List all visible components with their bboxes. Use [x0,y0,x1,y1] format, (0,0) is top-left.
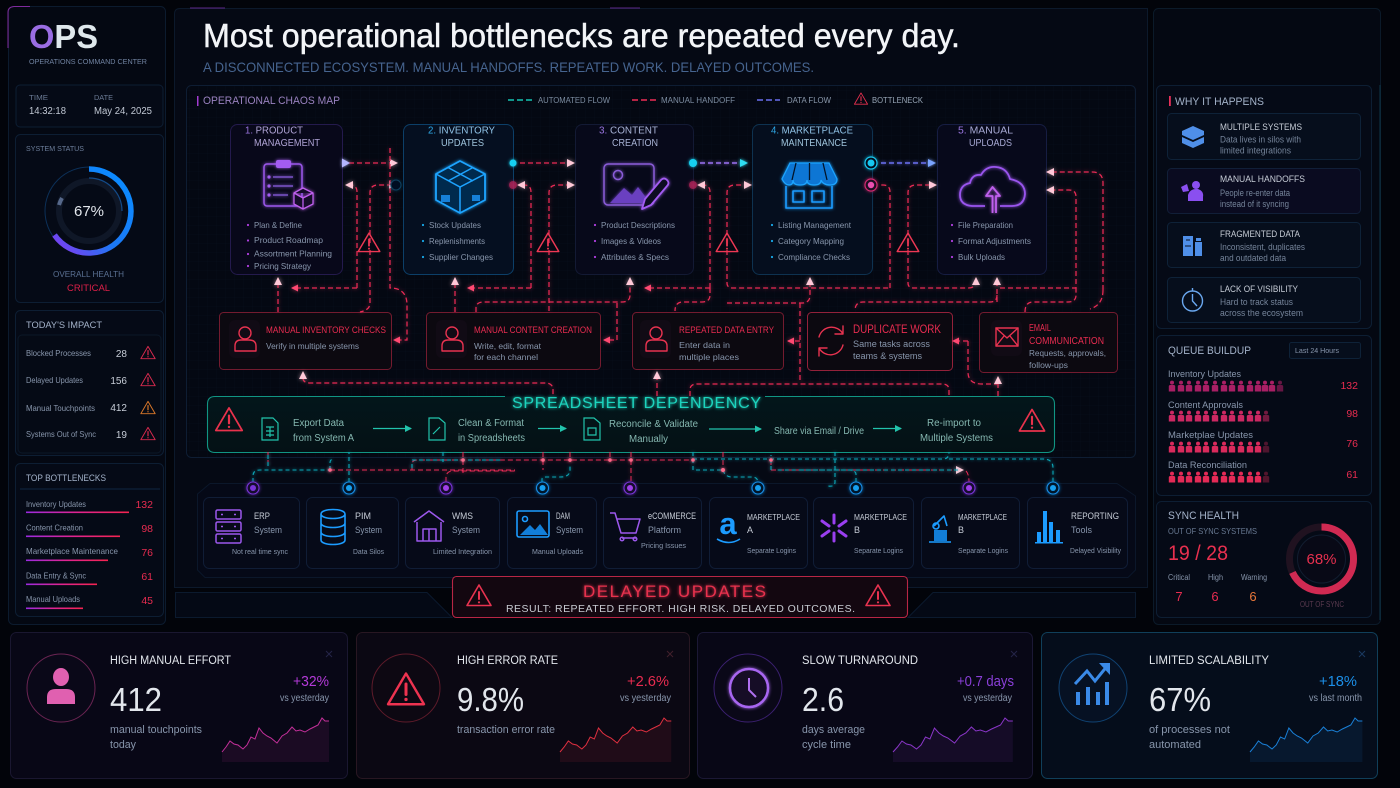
KPI card: high error rate: +2.6% [627,674,669,690]
KPI card: limited scalability: LIMITED SCALABILITY [1149,655,1269,667]
icon: cube stack [1182,126,1204,148]
icon: refresh [819,326,843,356]
manual card: duplicate work: Same tasks across [853,339,931,349]
card 1 bullet list: Assortment Planning [254,248,332,258]
step: re-import: Re-import to [927,418,981,429]
manual card: content creation: Write, edit, format [474,341,542,351]
row: blocked processes: Blocked Processes [26,348,91,358]
window controls [667,651,673,657]
window controls [1359,651,1365,657]
reason: multiple systems: Data lives in silos with [1220,134,1301,144]
system: marketplace C: MARKETPLACE [958,513,1007,522]
icon: person [640,320,671,358]
arrow [873,428,901,430]
reason: lack of visibility: LACK OF VISIBILITY [1220,284,1298,294]
KPI card: limited scalability: +18% [1319,674,1357,690]
row: blocked processes: 28 [116,349,127,360]
legend: MANUAL HANDOFF [661,95,735,105]
KPI card: high manual effort: 412 [110,681,162,718]
manual card: email communication: Requests, approvals, [1029,348,1106,358]
manual card: email communication: follow-ups [1029,360,1068,370]
icon: person [436,320,467,358]
heading: SPREADSHEET DEPENDENCY [512,395,761,412]
queue row: marketplace updates: Marketplae Updates [1168,430,1253,441]
callout: delayed updates [452,576,908,618]
queue row: content approvals [1168,400,1358,422]
system: marketplace A: A [747,525,753,535]
health gauge ring 67% [45,167,133,255]
time and date box: May 24, 2025 [94,106,152,117]
bottleneck: content creation: Content Creation [26,522,83,532]
panel: why it happens: WHY IT HAPPENS [1175,96,1264,108]
panel: sync health: SYNC HEALTH [1168,510,1239,522]
bottleneck: content creation: 98 [141,523,153,535]
KPI card: slow turnaround: cycle time [802,739,851,751]
system: marketplace A: MARKETPLACE [747,513,800,522]
bottleneck: inventory updates [26,499,153,513]
system: eCommerce [604,498,702,568]
process card 5: manual uploads: 5. MANUAL [958,124,1013,136]
reason: lack of visibility [1168,278,1360,322]
time range selector: Last 24 Hours [1295,346,1339,355]
window controls [1011,651,1017,657]
panel: today's impact: TODAY'S IMPACT [26,320,102,331]
bottleneck: manual uploads: Manual Uploads [26,594,80,604]
system: eCommerce: Pricing Issues [641,541,686,550]
severity counts: Warning [1241,573,1267,582]
legend: DATA FLOW [787,95,831,105]
manual handoff connectors [268,148,1103,482]
queue row: data reconciliation: 61 [1346,469,1358,481]
process card 4: marketplace maintenance [752,124,872,274]
card 5 bullet list [951,220,1031,262]
severity counts: High [1208,573,1223,582]
icon: spark [822,515,846,541]
logo: OPS: OPS [29,18,98,55]
manual card: inventory checks: Verify in multiple systems [266,341,359,351]
process card 1: product management [230,124,342,274]
queue row: inventory updates: Inventory Updates [1168,369,1241,380]
chaos map heading: OPERATIONAL CHAOS MAP [203,95,340,107]
row: blocked processes [26,346,155,360]
card 5 bullet list: Bulk Uploads [958,252,1005,262]
manual card: inventory checks: MANUAL INVENTORY CHECKS [266,325,386,336]
icon: letter a: a [719,506,737,541]
step: reconcile and validate [584,418,698,445]
card 3 bullet list: Attributes & Specs [601,252,669,262]
panel: system status [16,134,164,302]
sparkline [893,718,1013,762]
system: reporting: Delayed Visibility [1070,546,1121,555]
KPI card: high manual effort: vs yesterday [280,693,329,704]
systems band [198,484,1136,578]
step: export data [262,418,354,444]
manual card: duplicate work: DUPLICATE WORK [853,324,941,336]
icon: robot arm [929,516,951,542]
system: DAM: System [556,525,583,535]
manual card: email communication: EMAIL [1029,323,1051,334]
arrow [373,428,411,430]
manual card: duplicate work [808,312,952,370]
manual card: repeated data entry: Enter data in [679,340,730,350]
KPI card: slow turnaround: SLOW TURNAROUND [802,655,918,667]
panel: sync health [1156,502,1372,618]
queue row: data reconciliation [1168,460,1358,482]
donut chart 68% [1290,527,1354,591]
panel: sync health: 19 / 28 [1168,542,1228,565]
card 1 bullet list [247,220,332,271]
system: DAM [508,498,596,568]
step: export data: Export Data [293,418,344,429]
bottleneck warning icons on the map [358,233,919,252]
bottleneck: manual uploads: 45 [141,595,153,607]
system: PIM: PIM [355,511,371,521]
card 5 bullet list: Format Adjustments [958,236,1031,246]
icon: image [517,511,549,537]
step: clean and format: Clean & Format [458,418,524,429]
reason: fragmented data: FRAGMENTED DATA [1220,229,1300,239]
sparkline [560,718,671,762]
reason: fragmented data [1168,222,1360,268]
icon: chart in circle [1059,654,1127,722]
data flow arrows between process cards [342,157,935,191]
main title: Most operational bottlenecks are repeated every day. [203,17,960,54]
row: delayed updates: Delayed Updates [26,375,83,385]
automated flow connectors [253,452,1053,486]
process card 1: product management: MANAGEMENT [254,137,321,149]
reason: manual handoffs: MANUAL HANDOFFS [1220,174,1305,184]
system: reporting [1028,498,1128,568]
decorative footer plate right [908,592,1136,618]
system: marketplace B: Separate Logins [854,546,903,555]
bottleneck: marketplace maintenance [26,546,153,561]
system: marketplace C [922,498,1020,568]
donut chart 68%: 68% [1306,551,1337,568]
panel: spreadsheet dependency [208,395,1054,452]
process card 2: inventory updates: UPDATES [441,137,484,149]
panel: system status: CRITICAL [67,283,110,294]
time and date box: DATE [94,93,113,102]
step: re-import [920,418,993,444]
KPI card: slow turnaround: days average [802,724,865,736]
card 4 bullet list [771,220,852,262]
row: delayed updates [26,373,155,387]
icon: cart [610,513,640,541]
severity counts [1168,573,1267,604]
row: delayed updates: 156 [110,376,127,387]
manual card: repeated data entry: REPEATED DATA ENTRY [679,325,775,336]
system: reporting: Tools [1071,525,1092,535]
KPI card: high manual effort [10,632,348,778]
icon: person in circle [27,654,95,722]
icon: person [229,320,260,358]
severity counts: 7 [1175,589,1183,604]
system: ERP: Not real time sync [232,547,288,556]
KPI card: high error rate: transaction error rate [457,724,555,736]
manual card: content creation [426,312,600,370]
manual card: repeated data entry [632,312,784,370]
manual card: content creation: MANUAL CONTENT CREATION [474,325,592,336]
panel: top bottlenecks: TOP BOTTLENECKS [26,473,106,484]
icon: bars [1035,511,1063,544]
KPI card: high error rate: vs yesterday [620,693,671,704]
callout: delayed updates: DELAYED UPDATES [583,582,766,601]
system: DAM: DAM [556,511,570,521]
icon: box [436,161,485,213]
card 1 bullet list: Plan & Define [254,220,302,230]
sparkline [1250,718,1362,762]
legend [508,93,923,105]
panel: queue buildup: QUEUE BUILDUP [1168,345,1251,357]
severity counts: Critical [1168,573,1190,582]
system: WMS: WMS [452,511,473,521]
panel: queue buildup [1156,336,1372,496]
severity counts: 6 [1249,589,1257,604]
system: marketplace B [814,498,914,568]
icon: image and pencil [604,164,668,209]
system: marketplace B: MARKETPLACE [854,513,907,522]
bottleneck: data entry and sync [26,570,153,585]
system: eCommerce: Platform [648,525,681,535]
arrow [538,428,566,430]
KPI card: high manual effort: manual touchpoints [110,724,202,736]
system: DAM: Manual Uploads [532,547,583,556]
left sidebar [8,6,166,624]
panel: today's impact [16,310,164,456]
step: reconcile and validate: Manually [629,434,668,445]
legend: BOTTLENECK [872,95,923,105]
manual card: email communication: COMMUNICATION [1029,336,1104,347]
reason: manual handoffs: instead of it syncing [1220,199,1289,209]
step: reconcile and validate: Reconcile & Validate [609,419,698,430]
system: ERP: ERP [254,511,270,521]
right sidebar [1154,8,1380,624]
icon: clipboard with box [264,160,313,209]
row: manual touchpoints: Manual Touchpoints [26,403,95,413]
row: systems out of sync [26,427,155,441]
KPI card: limited scalability: 67% [1149,681,1211,718]
card 1 bullet list: Pricing Strategy [254,261,312,271]
system: marketplace A: Separate Logins [747,546,796,555]
system: WMS: System [452,525,480,535]
row: manual touchpoints [26,401,155,414]
KPI card: high error rate [356,632,690,778]
reason: lack of visibility: across the ecosystem [1220,308,1303,318]
bottleneck: data entry and sync: 61 [141,571,153,583]
process card 3: content creation: CREATION [612,137,658,149]
KPI card: high manual effort: HIGH MANUAL EFFORT [110,655,231,667]
process card 5: manual uploads [938,124,1046,274]
KPI card: high manual effort: +32% [293,674,329,690]
system: PIM: Data Silos [353,547,384,556]
subtitle: operations command center: OPERATIONS COMMAND CENTER [29,57,148,66]
icon: envelope [991,320,1022,356]
icon: cloud upload [960,167,1025,213]
step: re-import: Multiple Systems [920,433,993,444]
queue row: inventory updates: 132 [1340,380,1358,392]
time and date box: 14:32:18 [29,106,66,117]
manual card: duplicate work: teams & systems [853,351,923,361]
card 4 bullet list: Listing Management [778,220,852,230]
card 4 bullet list: Category Mapping [778,236,844,246]
card 2 bullet list: Stock Updates [429,220,481,230]
queue row: data reconciliation: Data Reconciliation [1168,460,1247,471]
step: clean and format: in Spreadsheets [458,433,525,444]
bottleneck: manual uploads [26,594,153,609]
time range selector [1290,342,1360,358]
icon: warehouse [414,511,444,541]
step: share via email: Share via Email / Drive [774,426,864,437]
KPI card: limited scalability: automated [1149,739,1201,751]
panel: system status: SYSTEM STATUS [26,144,84,153]
reason: manual handoffs [1168,168,1360,214]
bottleneck: data entry and sync: Data Entry & Sync [26,570,87,580]
process card 4: marketplace maintenance: 4. MARKETPLACE [771,124,853,136]
panel: why it happens [1156,86,1372,328]
sparkline [222,718,329,762]
arrow [709,428,761,430]
card 2 bullet list [422,220,493,262]
process card 2: inventory updates: 2. INVENTORY [428,124,495,136]
system: marketplace B: B [854,525,860,535]
card 2 bullet list: Supplier Changes [429,252,493,262]
decorative footer plate left [176,592,452,618]
system: eCommerce: eCOMMERCE [648,511,696,521]
queue row: inventory updates [1168,369,1358,392]
KPI card: limited scalability: vs last month [1309,693,1362,704]
callout: delayed updates: RESULT: REPEATED EFFORT. HIGH RISK. DELAYED OUTCOMES. [506,603,855,615]
reason: manual handoffs: People re-enter data [1220,188,1290,198]
card 3 bullet list: Product Descriptions [601,220,675,230]
KPI card: slow turnaround [698,632,1032,778]
reason: fragmented data: and outdated data [1220,253,1286,263]
panel: sync health: OUT OF SYNC [1300,600,1344,609]
bottleneck: inventory updates: Inventory Updates [26,499,86,509]
row: systems out of sync: 19 [116,430,127,441]
queue row: content approvals: 98 [1346,408,1358,420]
KPI card: high manual effort: today [110,739,136,751]
row: systems out of sync: Systems Out of Sync [26,429,97,439]
icon: database [321,510,345,544]
reason: lack of visibility: Hard to track status [1220,297,1293,307]
system link nodes [247,482,1059,494]
card 1 bullet list: Product Roadmap [254,235,323,245]
card 3 bullet list: Images & Videos [601,236,661,246]
icon: clock in circle [714,654,782,722]
queue row: content approvals: Content Approvals [1168,400,1243,411]
panel: operational chaos map [186,86,1136,458]
time and date box [16,85,163,127]
icon: warning in circle [372,654,440,722]
card 3 bullet list [594,220,675,262]
bottleneck: marketplace maintenance: 76 [141,547,153,559]
panel: top bottlenecks [16,464,164,616]
icon: documents [1183,236,1202,256]
bottleneck: inventory updates: 132 [135,499,153,511]
legend: AUTOMATED FLOW [538,95,610,105]
window controls [326,651,332,657]
bottom spreadsheet to systems red links [268,452,771,482]
system: reporting: REPORTING [1071,511,1119,521]
row: manual touchpoints: 412 [110,403,127,414]
reason: multiple systems [1168,114,1360,160]
icon: people [1181,181,1203,201]
panel: sync health: OUT OF SYNC SYSTEMS [1168,526,1257,536]
bottleneck: content creation [26,522,153,537]
KPI card: high error rate: 9.8% [457,681,524,718]
manual card: repeated data entry: multiple places [679,352,739,362]
manual card: email communication [980,312,1118,372]
reason: multiple systems: MULTIPLE SYSTEMS [1220,122,1302,132]
process card 2: inventory updates [404,124,514,274]
system: ERP [204,498,300,568]
reason: fragmented data: Inconsistent, duplicates [1220,242,1305,252]
queue row: marketplace updates [1168,430,1358,452]
subtitle: A DISCONNECTED ECOSYSTEM. MANUAL HANDOFFS. REPEATED WORK. DELAYED OUTCOMES. [203,59,814,75]
node markers on spreadsheet links [328,458,773,472]
system: marketplace A [710,498,808,568]
bottleneck: marketplace maintenance: Marketplace Maintenance [26,546,118,556]
system: PIM: System [355,525,382,535]
system: marketplace C: B [958,525,964,535]
icon: warning right [1019,409,1045,431]
severity counts: 6 [1211,589,1219,604]
process card 3: content creation [576,124,694,274]
system: WMS: Limited Integration [433,547,492,556]
icon: storefront [782,163,837,208]
KPI card: slow turnaround: 2.6 [802,681,844,718]
health gauge ring 67%: 67% [74,203,104,220]
icon: stopwatch [1182,288,1202,311]
process card 1: product management: 1. PRODUCT [245,124,304,136]
KPI card: limited scalability: of processes not [1149,724,1230,736]
icon: servers [216,510,241,543]
process card 3: content creation: 3. CONTENT [599,124,659,136]
manual card: content creation: for each channel [474,352,538,362]
panel: system status: OVERALL HEALTH [53,270,124,279]
KPI card: slow turnaround: +0.7 days [957,674,1014,690]
process card 5: manual uploads: UPLOADS [969,137,1012,149]
KPI card: limited scalability [1042,632,1378,778]
manual card: inventory checks [220,312,392,370]
step: clean and format [429,418,525,444]
process card 4: marketplace maintenance: MAINTENANCE [781,137,847,149]
queue row: marketplace updates: 76 [1346,438,1358,450]
system: ERP: System [254,525,282,535]
system: WMS [406,498,500,568]
card 4 bullet list: Compliance Checks [778,252,850,262]
icon: warning left [216,408,242,430]
card 5 bullet list: File Preparation [958,220,1013,230]
KPI card: high error rate: HIGH ERROR RATE [457,655,558,667]
time and date box: TIME [29,93,48,102]
system: marketplace C: Separate Logins [958,546,1008,555]
card 2 bullet list: Replenishments [429,236,485,246]
reason: multiple systems: limited integrations [1220,146,1291,156]
KPI card: slow turnaround: vs yesterday [963,693,1012,704]
main panel frame [174,8,1148,588]
system: PIM [306,498,398,568]
step: export data: from System A [293,433,354,444]
